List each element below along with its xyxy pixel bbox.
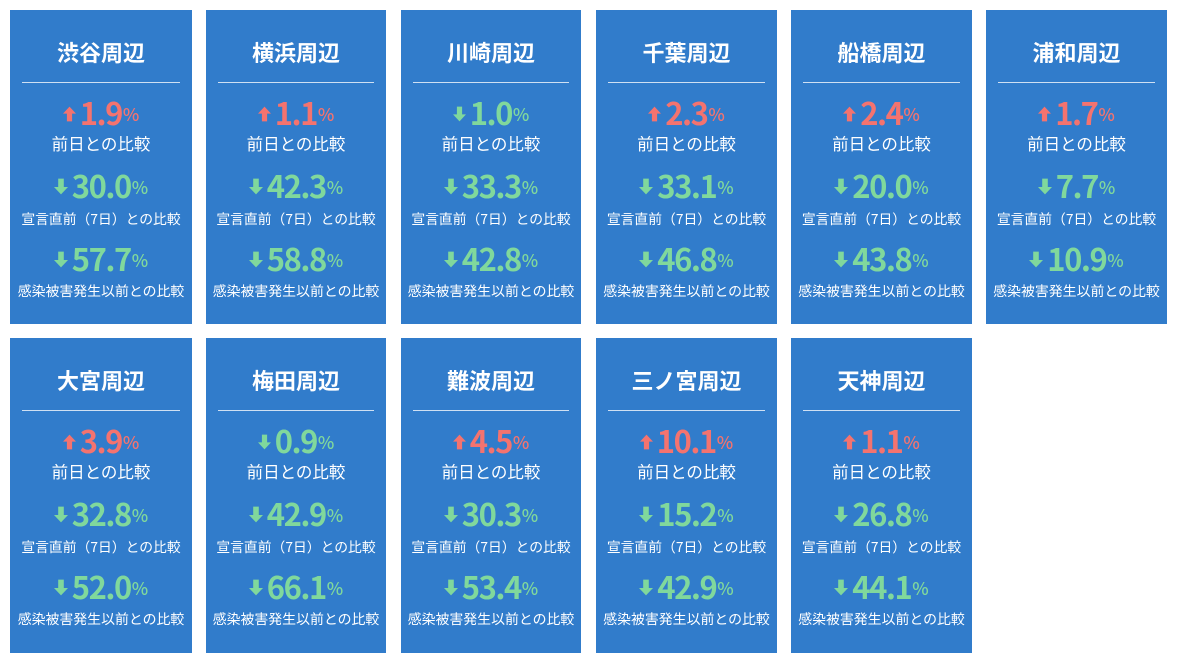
stat: previous day: %: [318, 430, 334, 455]
panel: 川崎周辺: [401, 10, 581, 324]
stat: before declaration: [54, 162, 148, 207]
panel: 浦和周辺: [986, 10, 1167, 324]
stat: before declaration: 7.7: [1056, 162, 1098, 207]
stat: previous day: [453, 89, 529, 134]
stat: before declaration: [444, 490, 538, 535]
label: previous day: 前日との比較: [637, 459, 736, 483]
stat: before declaration: 20.0: [852, 162, 911, 207]
label: before outbreak: 感染被害発生以前との比較: [798, 609, 965, 629]
stat: before declaration: [444, 162, 538, 207]
stat: before outbreak: [249, 563, 343, 608]
stat: previous day: %: [708, 102, 725, 127]
stat: before outbreak: %: [717, 576, 734, 601]
label: before outbreak: 感染被害発生以前との比較: [408, 609, 574, 629]
stat: before outbreak: %: [327, 576, 343, 601]
stat: before outbreak: %: [132, 576, 148, 601]
stat: previous day: [453, 417, 529, 462]
stat: before outbreak: 44.1: [852, 563, 911, 608]
stat: before declaration: %: [717, 503, 734, 528]
stat: before outbreak: 46.8: [657, 235, 716, 280]
heading: 川崎周辺: [447, 36, 535, 68]
stat: before declaration: %: [1099, 175, 1115, 200]
label: before declaration: 宣言直前（7日）との比較: [607, 208, 766, 228]
stat: before outbreak: [54, 235, 148, 280]
stat: before declaration: %: [132, 175, 148, 200]
label: before outbreak: 感染被害発生以前との比較: [798, 281, 965, 301]
stat: before outbreak: [834, 235, 929, 280]
label: previous day: 前日との比較: [832, 131, 931, 155]
panel: 梅田周辺: [206, 338, 386, 653]
panel: 天神周辺: [791, 338, 972, 653]
heading: 天神周辺: [837, 364, 926, 396]
panel: 渋谷周辺: [10, 10, 192, 324]
heading: 船橋周辺: [837, 36, 926, 68]
label: before outbreak: 感染被害発生以前との比較: [213, 281, 379, 301]
stat: previous day: 3.9: [80, 417, 122, 462]
label: before declaration: 宣言直前（7日）との比較: [21, 536, 181, 556]
label: before outbreak: 感染被害発生以前との比較: [603, 609, 770, 629]
stat: previous day: 0.9: [275, 417, 317, 462]
stat: previous day: %: [1098, 102, 1115, 127]
label: previous day: 前日との比較: [247, 131, 345, 155]
stat: previous day: [648, 89, 725, 134]
stat: previous day: 2.4: [860, 89, 902, 134]
panel: 千葉周辺: [596, 10, 777, 324]
label: previous day: 前日との比較: [442, 459, 540, 483]
heading: 浦和周辺: [1032, 36, 1120, 68]
label: before declaration: 宣言直前（7日）との比較: [997, 208, 1156, 228]
stat: previous day: [258, 417, 334, 462]
panel: 三ノ宮周辺: [596, 338, 777, 653]
stat: previous day: [1038, 89, 1115, 134]
stat: before outbreak: 10.9: [1047, 235, 1106, 280]
stat: before declaration: [1038, 162, 1115, 207]
stat: previous day: [640, 417, 733, 462]
heading: 大宮周辺: [57, 364, 145, 396]
stat: before outbreak: [639, 563, 734, 608]
label: previous day: 前日との比較: [52, 131, 150, 155]
stat: before declaration: %: [717, 175, 734, 200]
label: before declaration: 宣言直前（7日）との比較: [216, 208, 376, 228]
panel: 難波周辺: [401, 338, 581, 653]
stat: before declaration: 42.3: [267, 162, 326, 207]
label: before outbreak: 感染被害発生以前との比較: [213, 609, 379, 629]
stat: before declaration: [54, 490, 148, 535]
stat: before outbreak: %: [327, 248, 343, 273]
label: previous day: 前日との比較: [1027, 131, 1126, 155]
stat: before declaration: 33.3: [462, 162, 521, 207]
stat: before outbreak: [444, 563, 538, 608]
stat: before declaration: 42.9: [267, 490, 326, 535]
heading: 渋谷周辺: [57, 36, 145, 68]
label: before outbreak: 感染被害発生以前との比較: [408, 281, 574, 301]
label: before declaration: 宣言直前（7日）との比較: [411, 536, 571, 556]
label: previous day: 前日との比較: [832, 459, 931, 483]
stat: before outbreak: [639, 235, 734, 280]
stat: before declaration: [834, 162, 929, 207]
stat: before declaration: [249, 162, 343, 207]
label: previous day: 前日との比較: [442, 131, 540, 155]
stat: before declaration: 30.0: [72, 162, 131, 207]
stat: before outbreak: 57.7: [72, 235, 131, 280]
label: before outbreak: 感染被害発生以前との比較: [18, 609, 184, 629]
stat: before outbreak: %: [1107, 248, 1124, 273]
stat: before declaration: %: [522, 175, 538, 200]
stat: before declaration: 26.8: [852, 490, 911, 535]
stat: previous day: 1.7: [1055, 89, 1097, 134]
stat: previous day: [63, 89, 139, 134]
stat: before declaration: [834, 490, 929, 535]
stat: previous day: [258, 89, 334, 134]
stat: before outbreak: [1029, 235, 1124, 280]
stat: before declaration: %: [912, 175, 929, 200]
stat: previous day: 1.1: [860, 417, 902, 462]
stat: before declaration: [639, 162, 734, 207]
heading: 横浜周辺: [252, 36, 340, 68]
stat: before declaration: [249, 490, 343, 535]
stat: before outbreak: 52.0: [72, 563, 131, 608]
stat: before outbreak: [444, 235, 538, 280]
stat: before outbreak: 43.8: [852, 235, 911, 280]
label: before declaration: 宣言直前（7日）との比較: [411, 208, 571, 228]
label: previous day: 前日との比較: [52, 459, 150, 483]
stat: before declaration: %: [912, 503, 929, 528]
stat: before outbreak: %: [912, 576, 929, 601]
stat: before outbreak: 66.1: [267, 563, 326, 608]
stat: previous day: %: [123, 102, 139, 127]
stat: before outbreak: 42.8: [462, 235, 521, 280]
label: previous day: 前日との比較: [247, 459, 345, 483]
panel: 大宮周辺: [10, 338, 192, 653]
stat: previous day: 10.1: [657, 417, 716, 462]
stat: before declaration: 33.1: [657, 162, 716, 207]
heading: 千葉周辺: [642, 36, 730, 68]
label: before declaration: 宣言直前（7日）との比較: [802, 208, 961, 228]
stat: before outbreak: %: [912, 248, 929, 273]
stat: before outbreak: %: [132, 248, 148, 273]
stat: previous day: [63, 417, 139, 462]
stat: before declaration: [639, 490, 734, 535]
label: previous day: 前日との比較: [637, 131, 736, 155]
stat: before declaration: %: [522, 503, 538, 528]
stat: before declaration: %: [132, 503, 148, 528]
heading: 難波周辺: [447, 364, 535, 396]
stat: before declaration: %: [327, 503, 343, 528]
heading: 梅田周辺: [252, 364, 340, 396]
stat: previous day: %: [123, 430, 139, 455]
stat: before outbreak: %: [522, 576, 538, 601]
heading: 三ノ宮周辺: [631, 364, 742, 396]
stat: previous day: %: [717, 430, 733, 455]
stat: before outbreak: [54, 563, 148, 608]
stat: previous day: %: [513, 430, 529, 455]
stat: before outbreak: 53.4: [462, 563, 521, 608]
stat: previous day: 4.5: [470, 417, 512, 462]
label: before declaration: 宣言直前（7日）との比較: [802, 536, 961, 556]
stat: before outbreak: %: [717, 248, 734, 273]
stat: before declaration: 30.3: [462, 490, 521, 535]
stat: before declaration: %: [327, 175, 343, 200]
stat: previous day: [843, 417, 920, 462]
stat: previous day: 1.1: [275, 89, 317, 134]
label: before declaration: 宣言直前（7日）との比較: [216, 536, 376, 556]
stat: previous day: 1.9: [80, 89, 122, 134]
label: before declaration: 宣言直前（7日）との比較: [607, 536, 766, 556]
stat: before declaration: 32.8: [72, 490, 131, 535]
stat: before declaration: 15.2: [657, 490, 716, 535]
panel: 横浜周辺: [206, 10, 386, 324]
stat: before outbreak: [249, 235, 343, 280]
stat: previous day: %: [513, 102, 529, 127]
stat: previous day: [843, 89, 920, 134]
label: before outbreak: 感染被害発生以前との比較: [993, 281, 1160, 301]
stat: previous day: %: [903, 102, 920, 127]
stat: before outbreak: %: [522, 248, 538, 273]
stat: previous day: %: [903, 430, 920, 455]
stat: previous day: 2.3: [665, 89, 707, 134]
label: before outbreak: 感染被害発生以前との比較: [603, 281, 770, 301]
stat: before outbreak: 58.8: [267, 235, 326, 280]
label: before outbreak: 感染被害発生以前との比較: [18, 281, 184, 301]
stat: previous day: 1.0: [470, 89, 512, 134]
stat: before outbreak: [834, 563, 929, 608]
stat: before outbreak: 42.9: [657, 563, 716, 608]
panel: 船橋周辺: [791, 10, 972, 324]
stat: previous day: %: [318, 102, 334, 127]
label: before declaration: 宣言直前（7日）との比較: [21, 208, 181, 228]
